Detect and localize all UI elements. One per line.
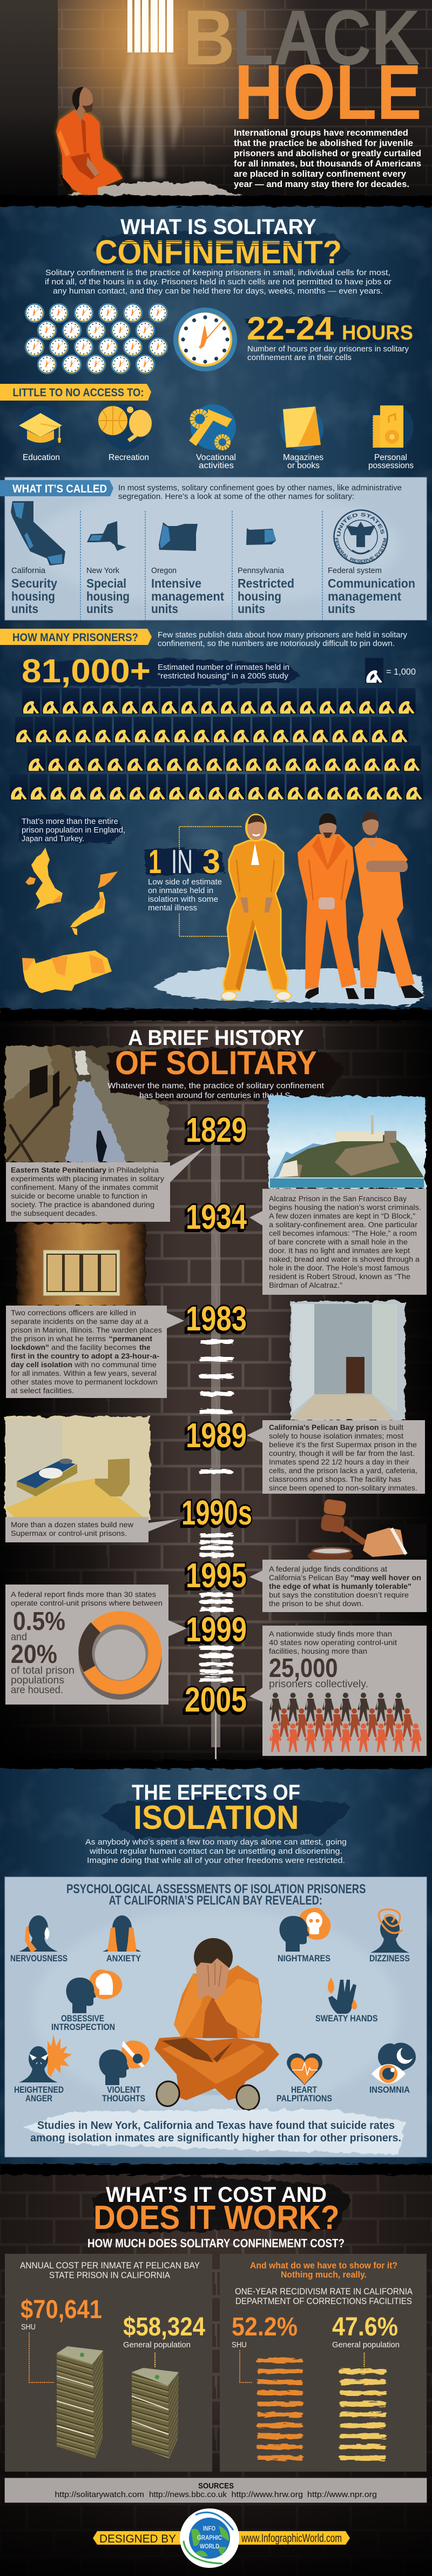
designed-by banner: DESIGNED BY xyxy=(99,2533,176,2545)
callout: 1999: populations xyxy=(11,1675,64,1686)
year: 1999: 1999 xyxy=(186,1610,247,1649)
stat: SHU rate xyxy=(232,2313,298,2382)
section: how many prisoners xyxy=(0,629,424,1006)
map: pennsylvania xyxy=(246,528,276,545)
callout: 1989: believe it’s the first Supermax prison in the xyxy=(269,1440,417,1449)
unit names: management xyxy=(151,589,224,603)
stat: 81,000+: “restricted housing” in a 2005 study xyxy=(158,672,289,681)
seal: federal reserve: FEDERAL RESERVE SYSTEM xyxy=(335,538,387,563)
callout: 2005: A nationwide study finds more than xyxy=(269,1629,392,1638)
history intro xyxy=(107,1082,324,1100)
callout: 1934: A few dozen inmates are kept in “D Block,” xyxy=(269,1212,415,1220)
stat: 1 in 3: isolation with some xyxy=(148,895,218,904)
callout: 1995: A federal judge finds conditions at xyxy=(269,1565,387,1573)
callout: 1995: "may well hover on xyxy=(350,1573,421,1582)
column labels: California xyxy=(11,567,46,575)
callout: 1999: are housed. xyxy=(11,1685,63,1696)
panel intro xyxy=(118,484,402,501)
stat: 81,000+: 81,000+ xyxy=(22,653,151,689)
brush under inmates xyxy=(153,968,424,1006)
photo: alcatraz xyxy=(268,1096,426,1188)
banner heading: WHAT IT’S CALLED xyxy=(12,483,107,495)
effect labels: bottom row: PALPITATIONS xyxy=(276,2093,332,2104)
recidivism heading xyxy=(235,2286,413,2306)
panel: sources: SOURCES xyxy=(198,2481,234,2491)
callout: 1934: cell becomes infamous: “The Hole,” a room xyxy=(269,1229,417,1237)
effect labels: top row: NERVOUSNESS xyxy=(10,1953,68,1963)
banner heading: HOW MANY PRISONERS? xyxy=(12,631,138,644)
callout: 1989: California's Pelican Bay prison xyxy=(269,1423,379,1432)
money stack: general population xyxy=(132,2368,179,2459)
panel: sources xyxy=(5,2478,427,2502)
brush behind heading xyxy=(107,1047,346,1101)
intro paragraph: International groups have recommended xyxy=(234,128,408,138)
definition text: any human contact, and they can be held there for days, weeks, months — even years. xyxy=(53,287,383,296)
icon: dizziness xyxy=(370,1909,409,1953)
icon: magazines xyxy=(280,407,323,450)
inmate two xyxy=(298,813,359,999)
icon: sweaty hands xyxy=(328,1978,357,2014)
unit names: Security xyxy=(11,576,57,590)
designed-by banner: www.InfographicWorld.com xyxy=(241,2532,342,2545)
year: 1990s: 1990s xyxy=(181,1493,252,1532)
money stack: SHU xyxy=(57,2346,103,2459)
unit names: units xyxy=(151,602,178,616)
stat: SHU cost: $70,641 xyxy=(21,2295,102,2324)
column labels: Pennsylvania xyxy=(238,567,285,575)
label: obsessive introspection xyxy=(51,2013,115,2032)
section intro: confinement, so the numbers are notoriously difficult to pin down. xyxy=(158,640,395,648)
label: obsessive introspection: OBSESSIVE xyxy=(61,2013,104,2023)
icon labels xyxy=(23,453,414,470)
heading: THE EFFECTS OF xyxy=(132,1781,300,1805)
panel heading xyxy=(66,1882,366,1908)
unit names: Communication xyxy=(328,576,415,590)
panel: sources: http://www.hrw.org xyxy=(231,2490,303,2499)
stat: SHU rate: SHU xyxy=(232,2340,247,2349)
icon labels: or books xyxy=(287,461,320,470)
callout: 1983: prison in Marion, Illinois. The warden places xyxy=(11,1326,162,1334)
effect labels: top row: DIZZINESS xyxy=(369,1953,410,1963)
effect labels: top row: NIGHTMARES xyxy=(278,1953,330,1963)
stat: 1 in 3: IN xyxy=(171,843,193,881)
callout: 2005: 40 states now operating control-unit xyxy=(269,1638,397,1647)
callout: 1999: A federal report finds more than 30 states xyxy=(11,1590,156,1599)
logo: INFO xyxy=(203,2525,215,2532)
panel intro: segregation. Here’s a look at some of the other names for solitary: xyxy=(118,492,354,501)
unit names: housing xyxy=(238,589,281,603)
panel intro: In most systems, solitary confinement goes by other names, like administrative xyxy=(118,484,402,492)
callout: 1934: naked; bread and water is shoved through a xyxy=(269,1255,420,1263)
stat: 1 in 3: Low side of estimate xyxy=(148,878,222,887)
pictogram: 81 inmates xyxy=(10,688,423,800)
recidivism heading: ONE-YEAR RECIDIVISM RATE IN CALIFORNIA xyxy=(235,2286,413,2297)
stat: 1 in 3: mental illness xyxy=(148,904,197,913)
year: 1995: 1995 xyxy=(186,1556,247,1595)
year: 2005: 2005 xyxy=(185,1680,247,1719)
icon: nervousness xyxy=(19,1915,58,1953)
photo: cell window xyxy=(17,1223,146,1306)
legend xyxy=(365,658,416,683)
callout: 1829 xyxy=(6,1147,205,1222)
effect labels: bottom row: ANGER xyxy=(25,2093,52,2104)
callout: 1934: hole in the door. The Hole’s most famous xyxy=(269,1263,409,1272)
effects intro: Imagine doing that while all of your other freedoms were restricted. xyxy=(87,1856,345,1865)
conclusion text: among isolation inmates are significantly higher than for other prisoners. xyxy=(30,2132,401,2144)
effect labels: top row xyxy=(10,1953,410,1963)
intro paragraph: prisoners and abolished or greatly curtailed xyxy=(234,149,421,158)
heading: DOES IT WORK? xyxy=(93,2199,339,2236)
heading: CONFINEMENT? xyxy=(95,234,342,270)
callout: 1934: Birdman of Alcatraz.” xyxy=(269,1281,342,1289)
callout: 1829: confinement. Many of the inmates commit xyxy=(11,1183,158,1192)
callout: 1934: door. It has no light and inmates are kept xyxy=(269,1246,410,1255)
callout: 1989: country, though it will be far from the last. xyxy=(269,1449,415,1457)
stat: 81,000+ xyxy=(19,653,300,689)
heading xyxy=(132,1781,300,1836)
effect labels: bottom row: THOUGHTS xyxy=(102,2093,145,2104)
photo: cell with bunk xyxy=(5,1416,150,1519)
panel: recidivism xyxy=(220,2254,427,2472)
icon labels: possessions xyxy=(368,461,414,470)
definition text: Solitary confinement is the practice of keeping prisoners in small, individual cells for most, xyxy=(45,269,390,277)
callout: 1983: Two corrections officers are killed in xyxy=(11,1308,136,1317)
callout: 1983: the prison in what he terms xyxy=(11,1334,106,1343)
stat: 1 in 3 xyxy=(145,843,225,913)
effects intro: without regular human contact can be unsettling and disorienting. xyxy=(89,1847,342,1856)
history intro: Whatever the name, the practice of solitary confinement xyxy=(107,1082,324,1090)
icon: violent thoughts xyxy=(99,2040,150,2085)
icon labels: Recreation xyxy=(109,453,149,462)
cost heading: STATE PRISON IN CALIFORNIA xyxy=(49,2270,171,2280)
panel: what it's called xyxy=(0,477,427,621)
callout: 1999: of total prison xyxy=(11,1665,75,1676)
conclusion text xyxy=(30,2119,401,2144)
callout: 1999 xyxy=(5,1585,187,1705)
callout: 1989: cells, and the prison lacks a yard, cafeteria, xyxy=(269,1466,417,1475)
unit names: units xyxy=(86,602,113,616)
icon: personal possessions xyxy=(368,404,414,450)
label: sweaty hands: SWEATY HANDS xyxy=(315,2013,378,2023)
unit names: units xyxy=(328,602,355,616)
people pictogram xyxy=(269,1693,422,1752)
column labels: New York xyxy=(86,567,120,575)
callout: 1999: and xyxy=(11,1632,27,1643)
icon labels: Education xyxy=(23,453,60,462)
logo: WORLD xyxy=(200,2542,219,2550)
icon: obsessive introspection xyxy=(66,1969,122,2013)
panel: annual cost xyxy=(5,2254,212,2472)
intro paragraph xyxy=(234,128,421,189)
stat: general population rate: General population xyxy=(332,2340,400,2349)
callout: 1999: 0.5% xyxy=(13,1607,65,1636)
section intro xyxy=(158,631,408,648)
callout: 1999: operate control-unit prisons where between xyxy=(11,1599,163,1607)
callout: 1995: but says the constitution doesn’t require xyxy=(269,1590,409,1599)
section: cost xyxy=(0,2164,432,2576)
callout: 1829: the subsequent decades. xyxy=(11,1209,97,1217)
section intro: Few states publish data about how many prisoners are held in solitary xyxy=(158,631,408,640)
legend: = 1,000 xyxy=(386,667,416,677)
label: obsessive introspection: INTROSPECTION xyxy=(51,2022,115,2032)
banner heading xyxy=(0,480,113,496)
callout: 1989: classrooms and shops. The facility has xyxy=(269,1475,401,1483)
callout: 1989: solely to house isolation inmates; most xyxy=(269,1432,403,1440)
callout: 1983: the xyxy=(139,1343,151,1352)
callout: 2005 xyxy=(249,1626,427,1756)
seal: federal reserve xyxy=(333,509,388,564)
comparison text: prison population in England, xyxy=(22,826,125,835)
icon: vocational xyxy=(189,404,236,450)
heading: ISOLATION xyxy=(133,1799,299,1836)
callout: 1934: Alcatraz Prison in the San Francisco Bay xyxy=(269,1194,407,1203)
stat: general population rate: 47.6% xyxy=(332,2313,398,2341)
icon: nightmares xyxy=(279,1908,330,1952)
intro paragraph: are placed in solitary confinement every xyxy=(234,169,407,179)
large clock xyxy=(173,308,237,371)
section: hero xyxy=(0,0,432,201)
section: what is solitary confinement xyxy=(0,196,432,1015)
icon: education xyxy=(19,405,62,449)
icon labels: activities xyxy=(199,461,234,470)
illustration: seated prisoner xyxy=(154,1938,279,2112)
barred window xyxy=(127,0,173,52)
callout: 1983: other states move to permanent lockdown xyxy=(11,1377,158,1386)
callout: 1829: in Philadelphia xyxy=(108,1166,159,1174)
panel: assessments xyxy=(5,1877,427,2157)
icon: heart palpitations xyxy=(287,2053,322,2085)
orange question xyxy=(250,2260,397,2280)
timeline dashes xyxy=(200,1340,233,1682)
history intro: has been around for centuries in the U.S. xyxy=(139,1091,293,1100)
donut chart xyxy=(78,1611,162,1700)
callout: 1934 xyxy=(249,1189,427,1295)
seal: federal reserve: UNITED STATES xyxy=(337,512,384,536)
clock grid xyxy=(25,303,168,374)
icon: heightened anger xyxy=(19,2034,72,2082)
effect labels: bottom row: HEART xyxy=(291,2085,317,2095)
floor light xyxy=(66,182,242,196)
banner: little to no access xyxy=(0,384,151,401)
brush behind conclusion xyxy=(23,2109,405,2154)
callout: 1990s: Supermax or control-unit prisons. xyxy=(11,1529,127,1537)
callout: 2005: facilities, housing more than xyxy=(269,1647,367,1655)
bars: general population 47.6% xyxy=(340,2369,386,2460)
light rays xyxy=(120,52,181,178)
heading xyxy=(95,215,342,270)
inmate three xyxy=(354,812,424,999)
callout: 1983: for all inmates. Within a few years, several xyxy=(11,1369,157,1377)
photo: eastern state corridor xyxy=(5,1046,168,1162)
callout: 1983: separate incidents on the same day at a xyxy=(11,1317,148,1326)
heading: WHAT IS SOLITARY xyxy=(120,215,316,239)
callout: 1983: day cell isolation xyxy=(11,1360,72,1369)
callout: 1995: the prison to be shut down. xyxy=(269,1599,363,1608)
map: new york xyxy=(87,521,126,551)
callout: 2005: 25,000 xyxy=(269,1654,338,1683)
map: england xyxy=(25,848,63,909)
column labels: Federal system xyxy=(328,567,382,575)
banner: little to no access: LITTLE TO NO ACCESS TO: xyxy=(13,387,144,399)
callout: 2005: prisoners collectively. xyxy=(269,1679,368,1690)
callout: 1989: is built xyxy=(381,1423,403,1432)
stat: 81,000+: Estimated number of inmates held in xyxy=(158,663,289,672)
section: effects of isolation xyxy=(0,1760,432,2169)
callout: 1999: 20% xyxy=(11,1640,57,1669)
banner heading xyxy=(0,629,152,645)
inmate one xyxy=(221,814,291,1000)
definition text: if not all, of the hours in a day. Prisoners held in such cells are not permitted to have jobs or xyxy=(45,278,392,287)
unit names xyxy=(11,576,415,616)
stat: general population cost: General population xyxy=(123,2340,191,2349)
stat: 22-24 hours: confinement are in their cells xyxy=(247,354,352,362)
callout: 1995: California’s Pelican Bay xyxy=(269,1573,348,1582)
panel: sources: http://news.bbc.co.uk xyxy=(149,2490,227,2499)
unit names: management xyxy=(328,589,401,603)
conclusion text: Studies in New York, California and Texas have found that suicide rates xyxy=(37,2119,395,2132)
stat: general population cost xyxy=(123,2313,205,2368)
stat: 1 in 3: 1 xyxy=(148,843,161,881)
callout: 1829: society. The practice is abandoned during xyxy=(11,1200,154,1209)
stat: 1 in 3: 3 xyxy=(202,843,220,881)
icon labels: Magazines xyxy=(283,453,323,462)
callout: 1983 xyxy=(6,1306,184,1398)
column labels xyxy=(11,567,382,575)
comparison text xyxy=(19,814,125,843)
orange question: And what do we have to show for it? xyxy=(250,2260,397,2271)
brush behind heading xyxy=(92,2176,351,2233)
column labels: Oregon xyxy=(151,567,177,575)
map: oregon xyxy=(159,522,198,551)
icon: gavel xyxy=(308,1499,427,1562)
photo: concrete cell xyxy=(291,1301,405,1420)
callout: 1983: first in the country to adopt a 23-hour-a- xyxy=(11,1352,159,1360)
unit names: units xyxy=(238,602,265,616)
subheading: HOW MUCH DOES SOLITARY CONFINEMENT COST? xyxy=(87,2236,345,2250)
year: 1989: 1989 xyxy=(186,1416,247,1455)
comparison text: Japan and Turkey. xyxy=(22,835,84,843)
effect labels: bottom row: HEIGHTENED xyxy=(14,2085,64,2095)
designed-by banner xyxy=(93,2531,350,2545)
map: japan xyxy=(70,871,118,935)
stat: SHU cost xyxy=(21,2295,102,2382)
callout: 1995: the edge of what is humanly tolerable" xyxy=(269,1582,411,1590)
panel: sources: http://www.npr.org xyxy=(307,2490,377,2499)
callout: 1983: “permanent xyxy=(109,1334,152,1343)
section: brief history xyxy=(0,1009,432,1768)
callout: 1989: since been opened to non-solitary inmates. xyxy=(269,1483,417,1492)
timeline spine xyxy=(211,1142,220,1747)
heading: A BRIEF HISTORY xyxy=(128,1026,304,1050)
callout: 1829: suicide or become unable to function in xyxy=(11,1192,147,1200)
brush behind heading xyxy=(92,231,351,265)
callout: 1995 xyxy=(249,1560,427,1612)
stat: SHU cost: SHU xyxy=(21,2322,36,2332)
unit names: Restricted xyxy=(238,576,294,590)
dotted connectors xyxy=(179,827,241,936)
icon: insomnia xyxy=(372,2043,416,2084)
map: california xyxy=(11,501,65,565)
intro paragraph: year — and many stay there for decades. xyxy=(234,179,409,189)
stat: SHU rate: 52.2% xyxy=(232,2313,298,2341)
heading xyxy=(93,2183,339,2236)
effect labels: bottom row xyxy=(14,2085,410,2104)
stat: 22-24 hours xyxy=(244,310,421,362)
callout: 1983: with no communal time xyxy=(74,1360,157,1369)
panel heading: AT CALIFORNIA’S PELICAN BAY REVEALED: xyxy=(109,1893,322,1908)
orange question: Nothing much, really. xyxy=(281,2269,367,2280)
unit names: Special xyxy=(86,576,126,590)
callout: 1983: and the facility becomes xyxy=(51,1343,136,1352)
year: 1934: 1934 xyxy=(186,1197,247,1236)
callout: 1983: lockdown” xyxy=(11,1343,49,1352)
kneeling prisoner xyxy=(56,87,123,195)
icon labels: Personal xyxy=(374,453,407,462)
effect labels: top row: ANXIETY xyxy=(106,1953,141,1963)
recidivism heading: DEPARTMENT OF CORRECTIONS FACILITIES xyxy=(235,2296,412,2306)
logo xyxy=(180,2508,239,2568)
stat: 22-24 hours: Number of hours per day prisoners in solitary xyxy=(247,345,409,354)
icon labels: Vocational xyxy=(196,453,236,462)
callout: 1829: experiments with placing inmates in solitary xyxy=(11,1174,164,1183)
unit names: housing xyxy=(86,589,130,603)
column dividers xyxy=(80,511,322,620)
stat: general population rate xyxy=(332,2313,400,2367)
callout: 1990s xyxy=(5,1517,179,1542)
intro paragraph: that the practice be abolished for juvenile xyxy=(234,138,413,148)
intro paragraph: for all inmates, but thousands of Americans xyxy=(234,159,421,169)
stat: 1 in 3: on inmates held in xyxy=(148,887,213,895)
year: 1983: 1983 xyxy=(186,1299,247,1338)
heading: OF SOLITARY xyxy=(115,1044,317,1081)
cost heading xyxy=(20,2260,200,2280)
callout: 1934: of bare concrete with a small hole in the xyxy=(269,1237,408,1246)
stat: 22-24 hours: HOURS xyxy=(342,322,413,344)
stat: 22-24 hours: 22-24 xyxy=(247,310,334,347)
callout: 1983: at select facilities. xyxy=(11,1386,74,1395)
brush behind heading xyxy=(103,1795,351,1838)
heading: WHAT’S IT COST AND xyxy=(106,2183,327,2207)
logo: GRAPHIC xyxy=(197,2534,222,2541)
callout: 1989 xyxy=(247,1420,425,1494)
callout: 1990s: More than a dozen states build new xyxy=(11,1520,134,1529)
panel: sources: http://solitarywatch.com xyxy=(55,2490,144,2499)
heading xyxy=(115,1026,317,1081)
unit names: Intensive xyxy=(151,576,201,590)
callout: 1934: a solitary-confinement area. One particular xyxy=(269,1220,417,1229)
effect labels: bottom row: INSOMNIA xyxy=(369,2085,410,2095)
unit names: housing xyxy=(11,589,55,603)
callout: 1829: Eastern State Penitentiary xyxy=(11,1166,106,1174)
year: 1829: 1829 xyxy=(186,1110,247,1149)
callout: 1934: resident is Robert Stroud, known as “The xyxy=(269,1272,410,1281)
icon: anxiety xyxy=(103,1915,141,1952)
effect labels: bottom row: VIOLENT xyxy=(107,2085,141,2095)
callout: 1989: Inmates spend 22 1/2 hours a day in their xyxy=(269,1457,409,1466)
effects intro: As anybody who’s spent a few too many days alone can attest, going xyxy=(85,1838,347,1847)
icon: recreation xyxy=(98,404,152,450)
cost heading: ANNUAL COST PER INMATE AT PELICAN BAY xyxy=(20,2260,200,2271)
callout: 1934: begins housing the nation’s worst criminals. xyxy=(269,1203,421,1212)
effects intro xyxy=(85,1838,347,1865)
unit names: units xyxy=(11,602,38,616)
bars: SHU 52.2% xyxy=(257,2358,303,2460)
map: turkey xyxy=(22,950,112,993)
definition text xyxy=(45,269,392,296)
comparison text: That’s more than the entire xyxy=(22,817,118,826)
stat: general population cost: $58,324 xyxy=(123,2313,205,2341)
